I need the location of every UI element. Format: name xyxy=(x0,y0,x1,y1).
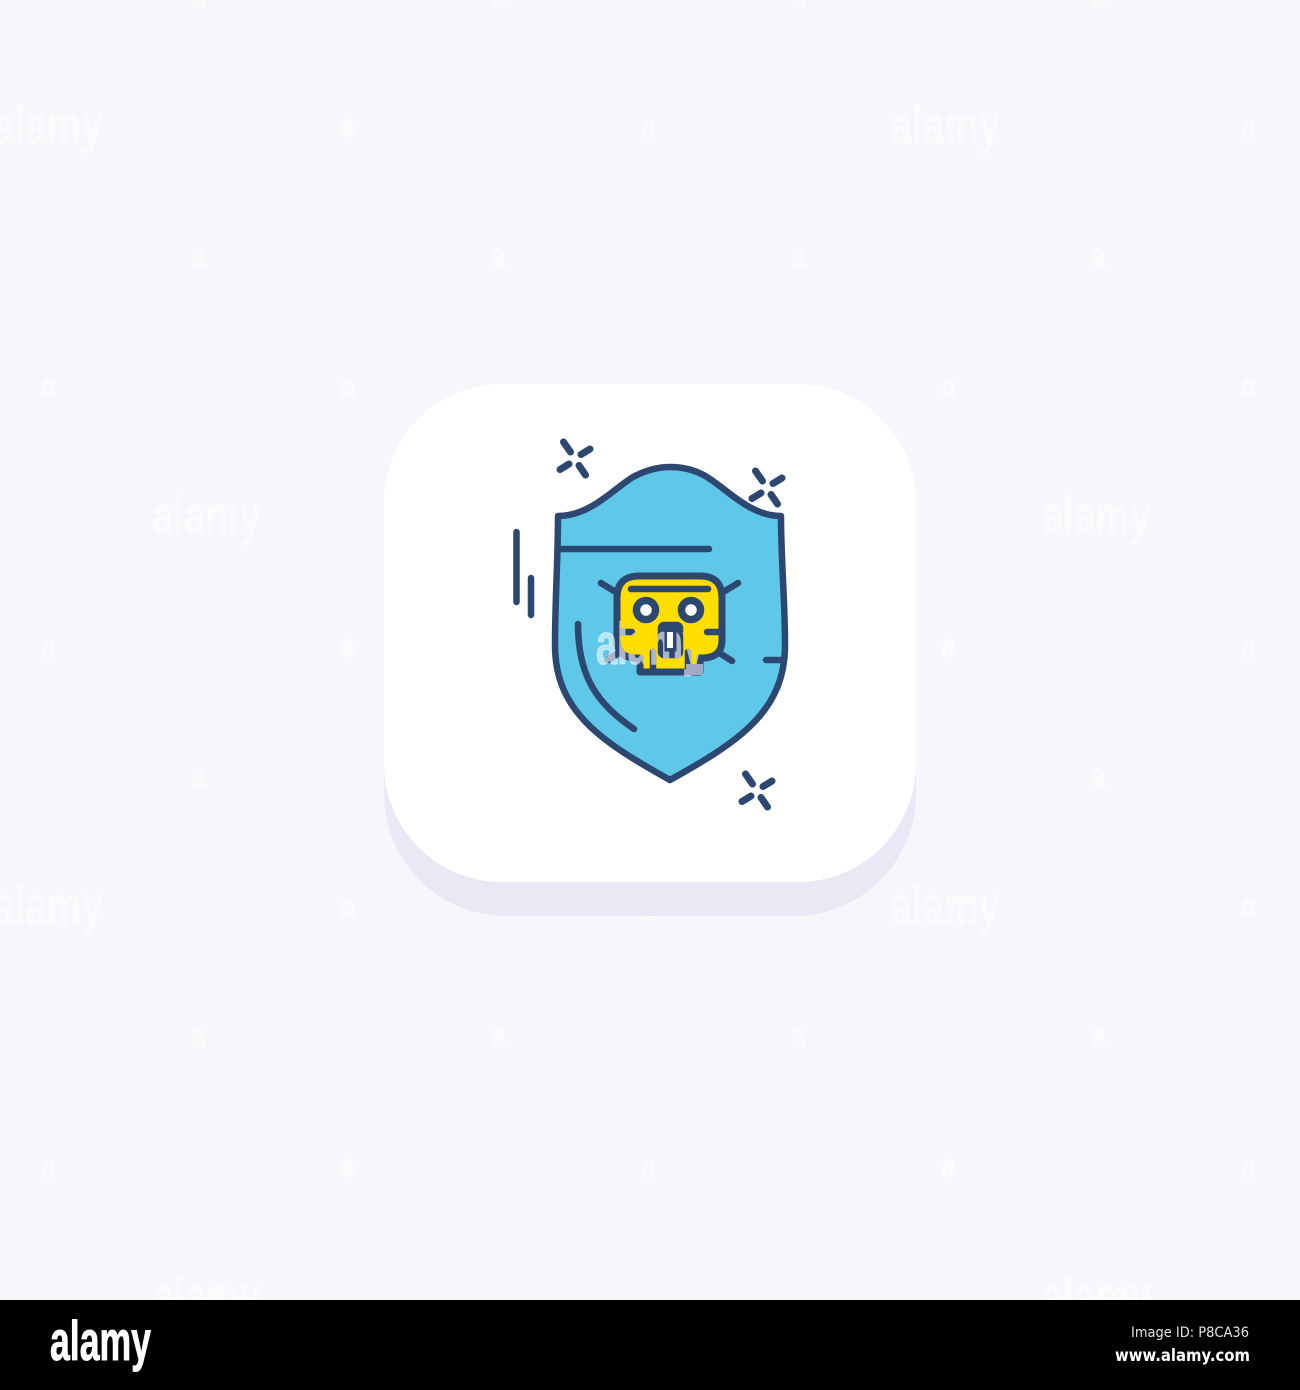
background watermarks: a xyxy=(41,367,57,405)
shield body xyxy=(555,467,785,780)
background watermarks: a xyxy=(641,107,657,145)
background watermarks: a xyxy=(491,1017,507,1055)
background watermarks: a xyxy=(340,887,356,925)
background watermarks: alamy xyxy=(152,1267,261,1327)
background watermarks: alamy xyxy=(152,486,261,546)
background watermarks: alamy xyxy=(890,95,1000,155)
background watermarks: a xyxy=(1241,887,1257,925)
background watermarks: a xyxy=(641,1147,657,1185)
background watermarks: a xyxy=(1241,367,1257,405)
background watermarks: a xyxy=(491,237,507,275)
infographic canvas xyxy=(0,438,1300,1390)
shield highlight lines xyxy=(561,549,783,729)
sparkle top right xyxy=(752,471,782,504)
footer bar xyxy=(0,1300,1300,1390)
background watermarks: a xyxy=(340,1147,356,1185)
background watermarks: a xyxy=(1091,1017,1107,1055)
image id: Image ID: P8CA36 xyxy=(1131,1325,1249,1341)
background watermarks: alamy xyxy=(1042,1267,1151,1327)
speed lines xyxy=(516,532,531,615)
background watermarks: a xyxy=(1241,1147,1257,1185)
footer logo: alamy xyxy=(50,1309,151,1372)
background watermarks: alamy xyxy=(1042,486,1151,546)
skull eyes xyxy=(636,600,700,620)
background watermarks: a xyxy=(641,887,657,925)
sparkle bottom right xyxy=(742,774,772,807)
background watermarks: a xyxy=(791,237,807,275)
sparkle top left xyxy=(560,442,590,475)
watermark over shield: alamy xyxy=(596,612,704,677)
skull head xyxy=(617,576,722,672)
skull xyxy=(601,576,738,672)
background watermarks: a xyxy=(41,627,57,665)
background watermarks: a xyxy=(791,1017,807,1055)
background watermarks: a xyxy=(941,1147,957,1185)
background watermarks: a xyxy=(191,237,207,275)
background watermarks: a xyxy=(41,1147,57,1185)
card white face xyxy=(384,384,916,882)
background watermarks: a xyxy=(1241,627,1257,665)
background watermarks: a xyxy=(340,367,356,405)
background watermarks: a xyxy=(1241,107,1257,145)
crossbones xyxy=(601,583,738,661)
background watermarks: a xyxy=(1091,757,1107,795)
background watermarks: alamy xyxy=(890,876,1000,936)
icon: shield with skull xyxy=(516,442,785,807)
background watermarks: a xyxy=(941,627,957,665)
watermark over dark strokes: alamy xyxy=(596,612,704,677)
skull nose xyxy=(661,625,680,655)
background watermarks: a xyxy=(191,757,207,795)
background watermarks: a xyxy=(941,367,957,405)
background watermarks: a xyxy=(340,107,356,145)
watermark descender xyxy=(686,664,703,675)
skull cheek marks and teeth xyxy=(617,632,722,671)
website: www.alamy.com xyxy=(1115,1346,1250,1366)
app button: raised card xyxy=(384,384,916,916)
background watermarks: a xyxy=(1091,237,1107,275)
background watermarks: a xyxy=(340,627,356,665)
card base shadow xyxy=(384,400,916,916)
background watermarks: a xyxy=(191,1017,207,1055)
skull brow xyxy=(631,586,708,592)
